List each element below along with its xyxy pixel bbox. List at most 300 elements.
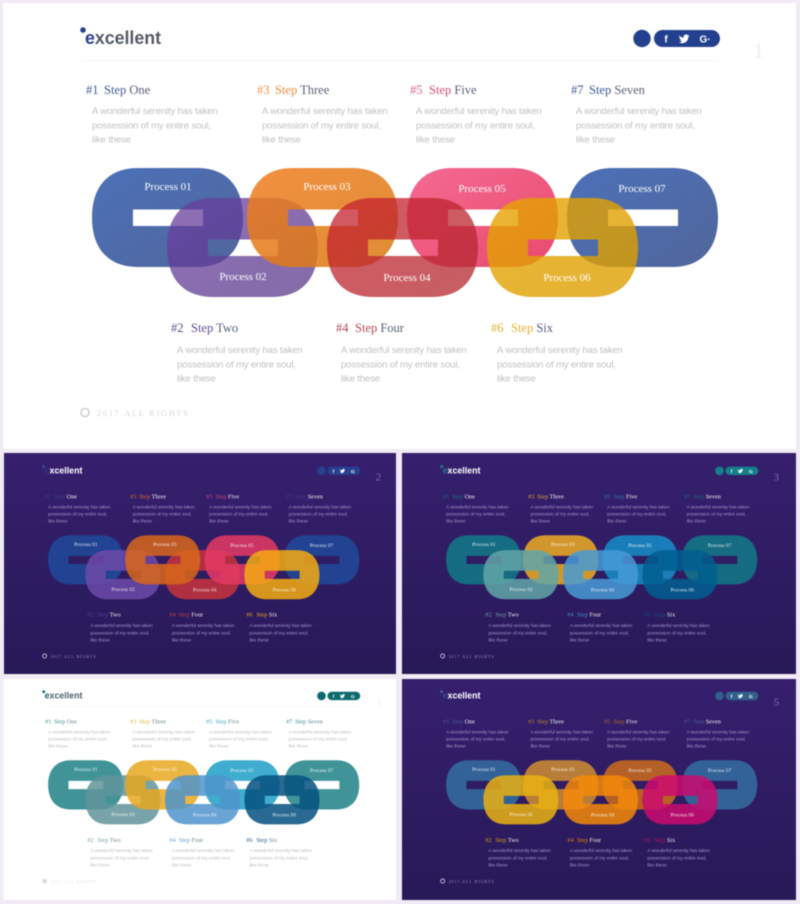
step 3: Step xyxy=(275,83,297,97)
step 1: like these xyxy=(48,744,68,750)
link: process 07: Process 07 xyxy=(708,768,731,774)
step 2 xyxy=(87,612,153,643)
step 1: Step xyxy=(54,719,65,726)
step 4: #4 xyxy=(567,837,574,844)
page number: 1 xyxy=(753,38,764,63)
step 5 xyxy=(410,83,542,146)
step 1: Step xyxy=(452,493,463,500)
step 1 xyxy=(86,83,218,146)
step 6: like these xyxy=(497,374,536,384)
social buttons: G· xyxy=(699,34,711,46)
step 7: Step xyxy=(693,719,704,726)
step 2: possession of my entire soul, xyxy=(177,360,296,370)
slide 2: dark purple with warm links xyxy=(4,453,396,674)
step 3: possession of my entire soul, xyxy=(531,737,590,743)
step 5: A wonderful serenity has taken xyxy=(209,504,272,510)
link: process 05 xyxy=(603,535,678,584)
social buttons: f xyxy=(731,469,733,475)
step 3: like these xyxy=(531,519,550,525)
step 6: possession of my entire soul, xyxy=(249,855,308,861)
step 7: Seven xyxy=(308,719,323,726)
step 6: A wonderful serenity has taken xyxy=(497,345,623,356)
link: process 06: Process 06 xyxy=(670,587,694,593)
step 4: possession of my entire soul, xyxy=(570,630,629,636)
step 6: Step xyxy=(256,612,267,619)
link: process 04: Process 04 xyxy=(383,272,431,284)
step 5 xyxy=(206,719,272,750)
step 1: like these xyxy=(92,134,131,146)
step 1: #1 xyxy=(443,719,449,726)
step 2 xyxy=(87,837,153,868)
step 6 xyxy=(644,612,710,643)
step 2: possession of my entire soul, xyxy=(90,855,149,861)
step 5: Step xyxy=(614,719,625,726)
step 1: possession of my entire soul, xyxy=(48,512,107,518)
step 6: Six xyxy=(269,837,277,844)
step 3: possession of my entire soul, xyxy=(262,120,381,132)
step 5: possession of my entire soul, xyxy=(209,737,268,743)
logo: excellent xyxy=(443,466,480,476)
link: process 04: Process 04 xyxy=(193,587,217,593)
step 5: like these xyxy=(209,744,229,750)
step 2: like these xyxy=(488,862,508,868)
link: process 05 xyxy=(603,760,678,809)
slide 1: light red-blue version xyxy=(3,3,796,449)
step 3: #3 xyxy=(528,493,534,500)
link: process 04 xyxy=(563,550,638,599)
step 5: #5 xyxy=(604,493,610,500)
step 1 xyxy=(45,719,111,750)
step 3: #3 xyxy=(130,719,136,726)
link: process 01 xyxy=(446,535,521,584)
page number: 5 xyxy=(774,697,780,709)
step 7: A wonderful serenity has taken xyxy=(687,729,749,735)
step 3: A wonderful serenity has taken xyxy=(531,729,593,735)
step 3: Step xyxy=(139,493,150,500)
step 2: A wonderful serenity has taken xyxy=(90,848,153,854)
step 4 xyxy=(567,612,633,643)
link: process 07 xyxy=(682,760,757,809)
step 1: possession of my entire soul, xyxy=(446,737,505,743)
step 7: possession of my entire soul, xyxy=(289,512,348,518)
link: process 03: Process 03 xyxy=(153,767,177,773)
step 2: possession of my entire soul, xyxy=(488,630,547,636)
step 3 xyxy=(528,719,593,750)
link: process 05 xyxy=(407,168,558,267)
step 1: possession of my entire soul, xyxy=(92,120,211,132)
link: process 04 xyxy=(563,775,638,824)
social buttons xyxy=(715,692,758,700)
step 5: Five xyxy=(454,83,477,97)
link: process 03: Process 03 xyxy=(551,542,575,548)
link: process 07 xyxy=(682,535,757,584)
step 1: possession of my entire soul, xyxy=(48,737,107,743)
step 7: A wonderful serenity has taken xyxy=(289,729,351,735)
step 1 xyxy=(45,493,111,525)
step 4: Step xyxy=(179,612,190,619)
step 2: Two xyxy=(216,321,238,335)
link: process 06: Process 06 xyxy=(272,587,296,593)
link: process 01 xyxy=(48,760,123,809)
step 1: A wonderful serenity has taken xyxy=(48,729,111,735)
step 5: Five xyxy=(626,719,637,726)
step 6: A wonderful serenity has taken xyxy=(647,848,710,854)
step 7: A wonderful serenity has taken xyxy=(289,504,351,510)
page number: 2 xyxy=(376,472,381,484)
link: process 02: Process 02 xyxy=(219,271,267,283)
step 2: Two xyxy=(110,612,121,619)
step 7: like these xyxy=(576,134,615,146)
link: process 06 xyxy=(244,775,319,824)
step 2: Two xyxy=(508,612,519,619)
step 2: like these xyxy=(177,374,216,384)
step 6: #6 xyxy=(246,837,253,844)
social buttons xyxy=(715,467,758,475)
copyright: 2017.ALL RIGHTS xyxy=(449,654,495,659)
step 7: Step xyxy=(295,493,306,500)
step 6: Six xyxy=(667,612,675,619)
step 5: Five xyxy=(228,719,239,726)
step 1: #1 xyxy=(45,493,51,500)
step 6 xyxy=(491,321,623,384)
link: process 03: Process 03 xyxy=(153,542,177,548)
step 4: A wonderful serenity has taken xyxy=(570,623,633,629)
step 7 xyxy=(684,719,749,750)
step 3: like these xyxy=(133,744,152,750)
step 3: #3 xyxy=(257,83,270,97)
step 1: Step xyxy=(452,719,463,726)
step 5: A wonderful serenity has taken xyxy=(209,729,272,735)
link: process 05: Process 05 xyxy=(628,543,652,549)
step 2: Two xyxy=(110,837,121,844)
page number: 3 xyxy=(774,472,780,484)
step 5: Five xyxy=(626,493,637,500)
step 1 xyxy=(443,719,509,750)
chain diagram xyxy=(48,760,359,824)
link: process 01: Process 01 xyxy=(144,181,192,193)
step 1: One xyxy=(67,719,77,726)
step 2: like these xyxy=(90,862,110,868)
step 7: possession of my entire soul, xyxy=(576,120,695,132)
link: process 04: Process 04 xyxy=(591,812,615,818)
step 4: possession of my entire soul, xyxy=(172,630,231,636)
step 2: Step xyxy=(97,612,108,619)
link: process 07 xyxy=(284,535,359,584)
link: process 04: Process 04 xyxy=(193,812,217,818)
step 4: A wonderful serenity has taken xyxy=(570,848,633,854)
step 7: #7 xyxy=(684,493,690,500)
step 6: possession of my entire soul, xyxy=(647,630,706,636)
step 1: A wonderful serenity has taken xyxy=(92,106,218,117)
slide 5: dark purple with gold and magenta links xyxy=(402,679,796,900)
link: process 06: Process 06 xyxy=(670,812,694,818)
step 3: A wonderful serenity has taken xyxy=(262,106,388,117)
logo: excellent xyxy=(443,691,480,701)
step 6: A wonderful serenity has taken xyxy=(647,623,710,629)
link: process 06 xyxy=(487,198,638,297)
link: process 04: Process 04 xyxy=(591,587,615,593)
step 3 xyxy=(257,83,388,146)
link: process 07: Process 07 xyxy=(310,543,333,549)
step 2: Step xyxy=(495,612,506,619)
step 2: A wonderful serenity has taken xyxy=(177,345,303,356)
link: process 07 xyxy=(567,168,718,267)
step 4 xyxy=(567,837,633,868)
step 5 xyxy=(604,493,670,525)
step 2: #2 xyxy=(485,837,492,844)
link: process 04 xyxy=(165,775,240,824)
step 2: Step xyxy=(191,321,213,335)
step 2: A wonderful serenity has taken xyxy=(488,623,551,629)
step 1: #1 xyxy=(443,493,449,500)
step 4: like these xyxy=(172,637,192,643)
step 4: like these xyxy=(570,637,590,643)
social buttons xyxy=(633,30,720,47)
step 6 xyxy=(246,612,312,643)
step 5: possession of my entire soul, xyxy=(607,512,666,518)
step 5: Step xyxy=(614,493,625,500)
step 3 xyxy=(130,493,195,525)
step 3: A wonderful serenity has taken xyxy=(531,504,593,510)
logo: excellent xyxy=(45,466,82,476)
step 5: Five xyxy=(228,493,239,500)
social buttons: f xyxy=(333,694,335,700)
step 5: like these xyxy=(607,519,627,525)
social buttons: f xyxy=(731,694,733,700)
step 5: Step xyxy=(216,719,227,726)
step 5: A wonderful serenity has taken xyxy=(607,504,670,510)
step 3: possession of my entire soul, xyxy=(133,512,192,518)
step 4: A wonderful serenity has taken xyxy=(172,848,235,854)
step 6: #6 xyxy=(491,321,504,335)
social buttons: f xyxy=(664,34,668,46)
step 1: like these xyxy=(446,744,466,750)
step 6: A wonderful serenity has taken xyxy=(249,623,312,629)
step 4: possession of my entire soul, xyxy=(172,855,231,861)
logo: excellent xyxy=(45,691,82,701)
link: process 02: Process 02 xyxy=(509,587,533,593)
step 3: Three xyxy=(550,493,564,500)
social buttons xyxy=(317,467,360,475)
step 6: #6 xyxy=(644,837,651,844)
step 6: like these xyxy=(249,637,269,643)
step 1: One xyxy=(67,493,77,500)
step 6: Step xyxy=(654,837,665,844)
step 3: Step xyxy=(537,493,548,500)
step 5: like these xyxy=(209,519,229,525)
step 6 xyxy=(246,837,312,868)
step 5: A wonderful serenity has taken xyxy=(607,729,670,735)
step 5: like these xyxy=(607,744,627,750)
step 2: like these xyxy=(488,637,508,643)
step 7 xyxy=(571,83,702,146)
step 6: Step xyxy=(256,837,267,844)
step 1: One xyxy=(465,719,475,726)
link: process 06 xyxy=(244,550,319,599)
slide 4: light with teal links xyxy=(4,679,396,900)
step 5: possession of my entire soul, xyxy=(209,512,268,518)
link: process 06 xyxy=(642,775,717,824)
link: process 07: Process 07 xyxy=(708,543,731,549)
step 3: A wonderful serenity has taken xyxy=(133,729,195,735)
step 7: Step xyxy=(693,493,704,500)
step 1: A wonderful serenity has taken xyxy=(446,504,509,510)
step 1: One xyxy=(465,493,475,500)
step 2 xyxy=(171,321,303,384)
link: process 02: Process 02 xyxy=(111,587,135,593)
step 4: Step xyxy=(577,612,588,619)
step 6: possession of my entire soul, xyxy=(249,630,308,636)
step 2: Step xyxy=(97,837,108,844)
step 5: #5 xyxy=(206,493,212,500)
copyright: 2017.ALL RIGHTS xyxy=(51,879,97,884)
step 2: #2 xyxy=(171,321,184,335)
step 4: Four xyxy=(380,321,404,335)
step 3: Step xyxy=(537,719,548,726)
link: process 07: Process 07 xyxy=(310,768,333,774)
link: process 06 xyxy=(642,550,717,599)
link: process 05: Process 05 xyxy=(230,543,254,549)
step 1: like these xyxy=(446,519,466,525)
step 3: Step xyxy=(139,719,150,726)
link: process 01: Process 01 xyxy=(74,542,98,548)
copyright: 2017.ALL RIGHTS xyxy=(449,879,495,884)
chain diagram xyxy=(446,760,757,824)
step 5: possession of my entire soul, xyxy=(416,120,535,132)
step 7: Step xyxy=(295,719,306,726)
link: process 03: Process 03 xyxy=(551,767,575,773)
step 4: possession of my entire soul, xyxy=(341,360,460,370)
link: process 01 xyxy=(446,760,521,809)
step 3 xyxy=(130,719,195,750)
step 7: like these xyxy=(687,744,706,750)
step 4: A wonderful serenity has taken xyxy=(341,345,467,356)
step 5: A wonderful serenity has taken xyxy=(416,106,542,117)
step 7: A wonderful serenity has taken xyxy=(576,106,702,117)
step 3: possession of my entire soul, xyxy=(133,737,192,743)
step 4 xyxy=(169,837,235,868)
step 7: #7 xyxy=(286,719,292,726)
chain diagram xyxy=(446,535,757,599)
step 3: Three xyxy=(152,493,166,500)
link: process 05: Process 05 xyxy=(458,183,506,195)
step 1: Step xyxy=(54,493,65,500)
step 6: Six xyxy=(667,837,675,844)
step 2: Two xyxy=(508,837,519,844)
step 6: possession of my entire soul, xyxy=(647,855,706,861)
step 4: like these xyxy=(341,374,380,384)
step 3: A wonderful serenity has taken xyxy=(133,504,195,510)
link: process 01 xyxy=(92,168,243,267)
step 2: #2 xyxy=(485,612,492,619)
link: process 01: Process 01 xyxy=(74,767,98,773)
step 7: possession of my entire soul, xyxy=(687,512,746,518)
step 2: possession of my entire soul, xyxy=(488,855,547,861)
step 4 xyxy=(169,612,235,643)
step 7: #7 xyxy=(571,83,584,97)
step 2 xyxy=(485,612,551,643)
link: process 01: Process 01 xyxy=(472,542,496,548)
link: process 03 xyxy=(247,168,398,267)
link: process 07: Process 07 xyxy=(618,183,666,195)
copyright: 2017.ALL RIGHTS xyxy=(51,654,97,659)
step 2: A wonderful serenity has taken xyxy=(90,623,153,629)
step 2: A wonderful serenity has taken xyxy=(488,848,551,854)
logo: excellent xyxy=(85,28,161,48)
step 3: Three xyxy=(300,83,329,97)
step 5: possession of my entire soul, xyxy=(607,737,666,743)
step 4: Four xyxy=(191,612,203,619)
step 5: like these xyxy=(416,134,455,146)
step 3: like these xyxy=(133,519,152,525)
step 1: Step xyxy=(104,83,126,97)
step 4: #4 xyxy=(169,612,176,619)
step 3: Three xyxy=(152,719,166,726)
link: process 06: Process 06 xyxy=(272,812,296,818)
step 6: like these xyxy=(647,637,667,643)
social buttons xyxy=(317,692,360,700)
step 6: #6 xyxy=(644,612,651,619)
step 4: like these xyxy=(570,862,590,868)
step 5 xyxy=(206,493,272,525)
step 7 xyxy=(286,493,351,525)
step 6: Step xyxy=(511,321,533,335)
step 4: A wonderful serenity has taken xyxy=(172,623,235,629)
step 4: Step xyxy=(355,321,377,335)
step 1 xyxy=(443,493,509,525)
step 4: #4 xyxy=(336,321,349,335)
step 7: like these xyxy=(289,519,308,525)
step 6: #6 xyxy=(246,612,253,619)
step 7: Seven xyxy=(614,83,645,97)
step 4: Four xyxy=(589,612,601,619)
step 7: #7 xyxy=(286,493,292,500)
link: process 03 xyxy=(125,535,200,584)
social buttons: G xyxy=(351,469,355,475)
step 6: A wonderful serenity has taken xyxy=(249,848,312,854)
step 7: Seven xyxy=(308,493,323,500)
step 3: Three xyxy=(550,719,564,726)
link: process 03 xyxy=(523,760,598,809)
step 7: possession of my entire soul, xyxy=(289,737,348,743)
chain diagram xyxy=(48,535,359,599)
page number: 1 xyxy=(377,697,382,709)
step 7 xyxy=(286,719,351,750)
link: process 03 xyxy=(523,535,598,584)
step 6: Step xyxy=(654,612,665,619)
link: process 07 xyxy=(284,760,359,809)
step 7: like these xyxy=(687,519,706,525)
step 5 xyxy=(604,719,670,750)
link: process 02 xyxy=(85,550,160,599)
step 6: Six xyxy=(536,321,553,335)
step 7: #7 xyxy=(684,719,690,726)
step 7: A wonderful serenity has taken xyxy=(687,504,749,510)
link: process 05: Process 05 xyxy=(628,768,652,774)
link: process 04 xyxy=(327,198,478,297)
step 1: A wonderful serenity has taken xyxy=(446,729,509,735)
step 2 xyxy=(485,837,551,868)
chain diagram xyxy=(92,168,718,297)
step 3: #3 xyxy=(130,493,136,500)
link: process 03: Process 03 xyxy=(303,181,351,193)
link: process 01: Process 01 xyxy=(472,767,496,773)
link: process 02 xyxy=(167,198,318,297)
social buttons: G xyxy=(749,694,753,700)
step 1: #1 xyxy=(86,83,98,97)
step 7: Step xyxy=(589,83,611,97)
step 4: Four xyxy=(589,837,601,844)
